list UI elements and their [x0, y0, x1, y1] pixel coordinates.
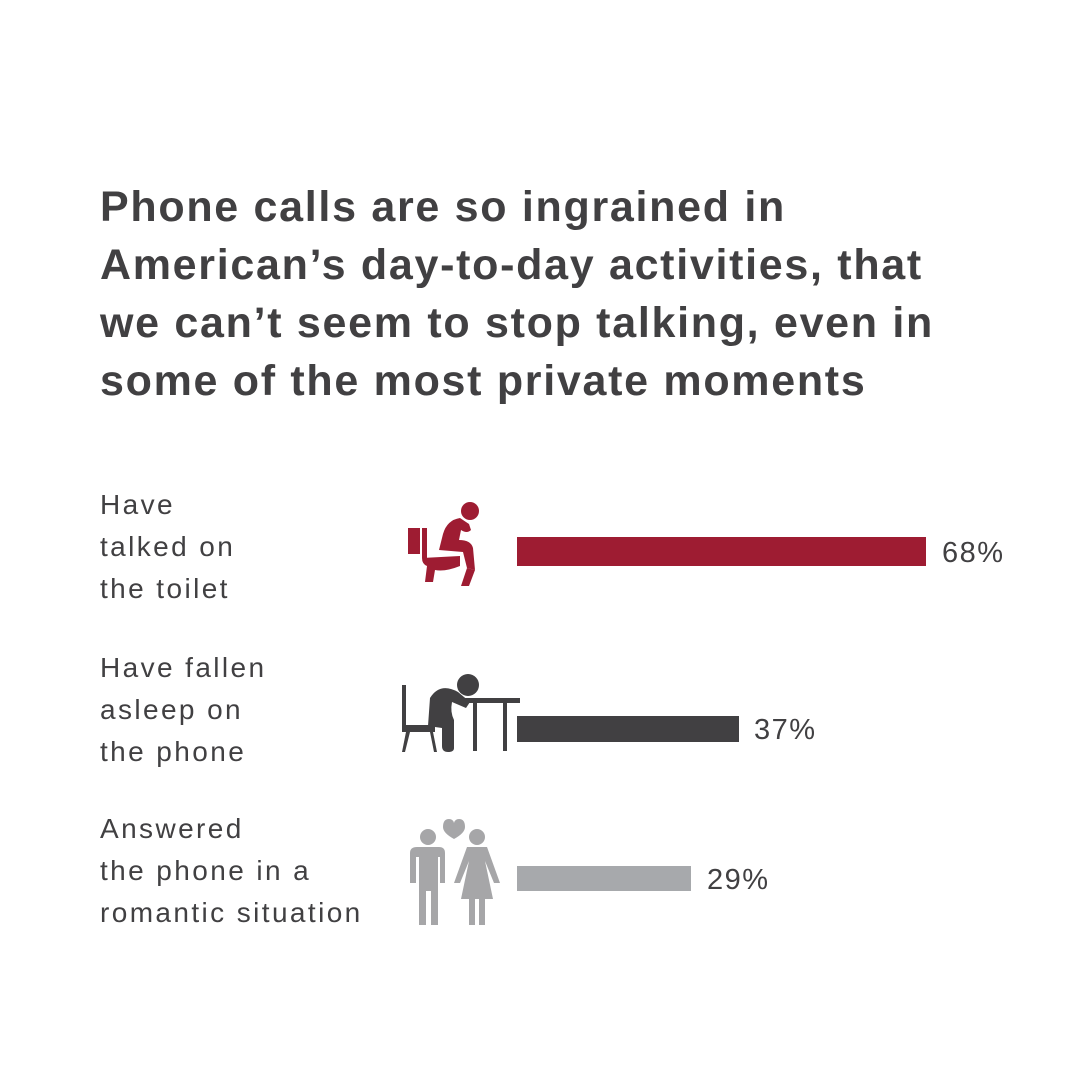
- title: we can’t seem to stop talking, even in: [100, 299, 934, 347]
- label: asleep: Have fallen: [100, 652, 266, 683]
- label: asleep: asleep on: [100, 694, 243, 725]
- icon: asleep at desk: [402, 674, 520, 752]
- title: [100, 183, 934, 405]
- label: toilet: [100, 489, 235, 604]
- label: romantic: Answered: [100, 813, 244, 844]
- label: romantic: [100, 813, 363, 928]
- icon: couple with heart: [410, 819, 500, 925]
- value: 37%: 37%: [754, 714, 817, 746]
- icon: toilet: [408, 502, 479, 586]
- label: toilet: the toilet: [100, 573, 230, 604]
- value: 68%: 68%: [942, 537, 1005, 569]
- label: romantic: the phone in a: [100, 855, 311, 886]
- title: Phone calls are so ingrained in: [100, 183, 786, 231]
- label: asleep: [100, 652, 266, 767]
- bar: 37%: [517, 716, 739, 742]
- title: some of the most private moments: [100, 357, 866, 405]
- label: romantic: romantic situation: [100, 897, 363, 928]
- value: 29%: 29%: [707, 864, 770, 896]
- bar: 68%: [517, 537, 926, 566]
- label: asleep: the phone: [100, 736, 246, 767]
- bar: 29%: [517, 866, 691, 891]
- label: toilet: talked on: [100, 531, 235, 562]
- title: American’s day-to-day activities, that: [100, 241, 923, 289]
- label: toilet: Have: [100, 489, 175, 520]
